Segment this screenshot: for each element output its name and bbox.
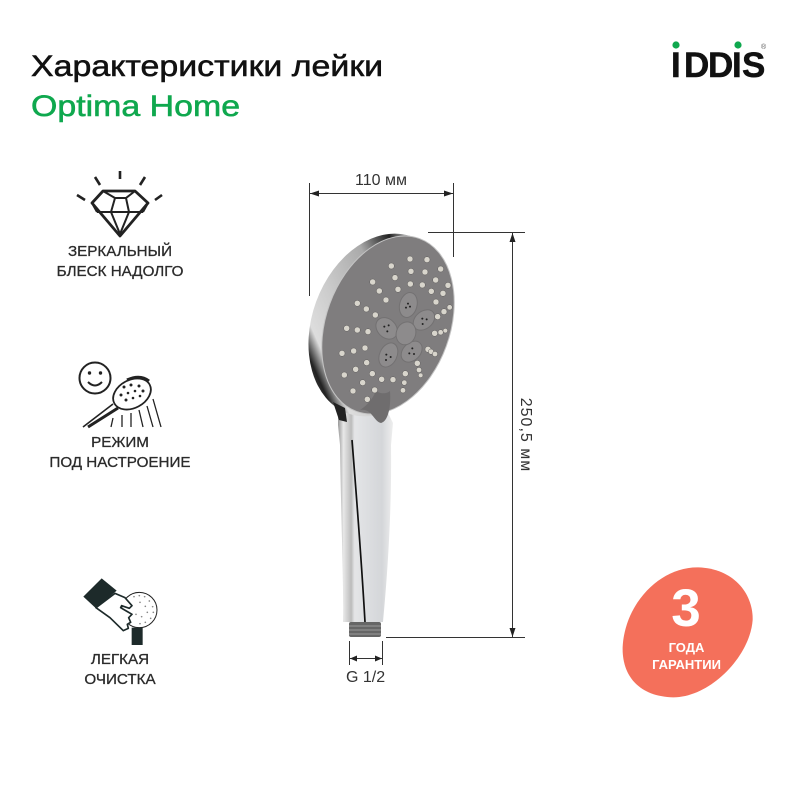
- label: mood mode: РЕЖИМ: [91, 434, 149, 451]
- label: mood mode: ПОД НАСТРОЕНИЕ: [49, 454, 191, 471]
- handle: [338, 400, 393, 622]
- label: mood mode: [49, 434, 191, 471]
- spray pads: [372, 291, 439, 370]
- grey face: [298, 217, 478, 433]
- lever: [360, 391, 390, 423]
- width dimension label: 110 мм: [355, 172, 407, 189]
- head rim: [284, 213, 476, 437]
- nozzles: [339, 256, 452, 402]
- logo: IDDIS: ®: [761, 43, 767, 51]
- warranty text: ГАРАНТИИ: [652, 657, 721, 672]
- warranty badge: [622, 567, 753, 698]
- height dimension label: 250,5 мм: [517, 398, 534, 472]
- label: easy cleaning: ЛЕГКАЯ: [91, 651, 149, 668]
- connector dimension label: G 1/2: [346, 669, 385, 686]
- icon: smiley and shower head: [78, 362, 162, 428]
- warranty text: [652, 640, 721, 672]
- label: mirror shine: ЗЕРКАЛЬНЫЙ: [68, 243, 172, 260]
- label: easy cleaning: [84, 651, 156, 688]
- thread: [349, 622, 381, 637]
- title: Характеристики лейки: [31, 50, 383, 83]
- neck shadow: [333, 402, 347, 422]
- warranty text: ГОДА: [669, 640, 704, 655]
- warranty number: 3: [671, 579, 701, 638]
- label: mirror shine: БЛЕСК НАДОЛГО: [57, 263, 183, 280]
- label: easy cleaning: ОЧИСТКА: [84, 671, 156, 688]
- subtitle: product name: Optima Home: [31, 90, 240, 123]
- label: mirror shine: [57, 242, 183, 280]
